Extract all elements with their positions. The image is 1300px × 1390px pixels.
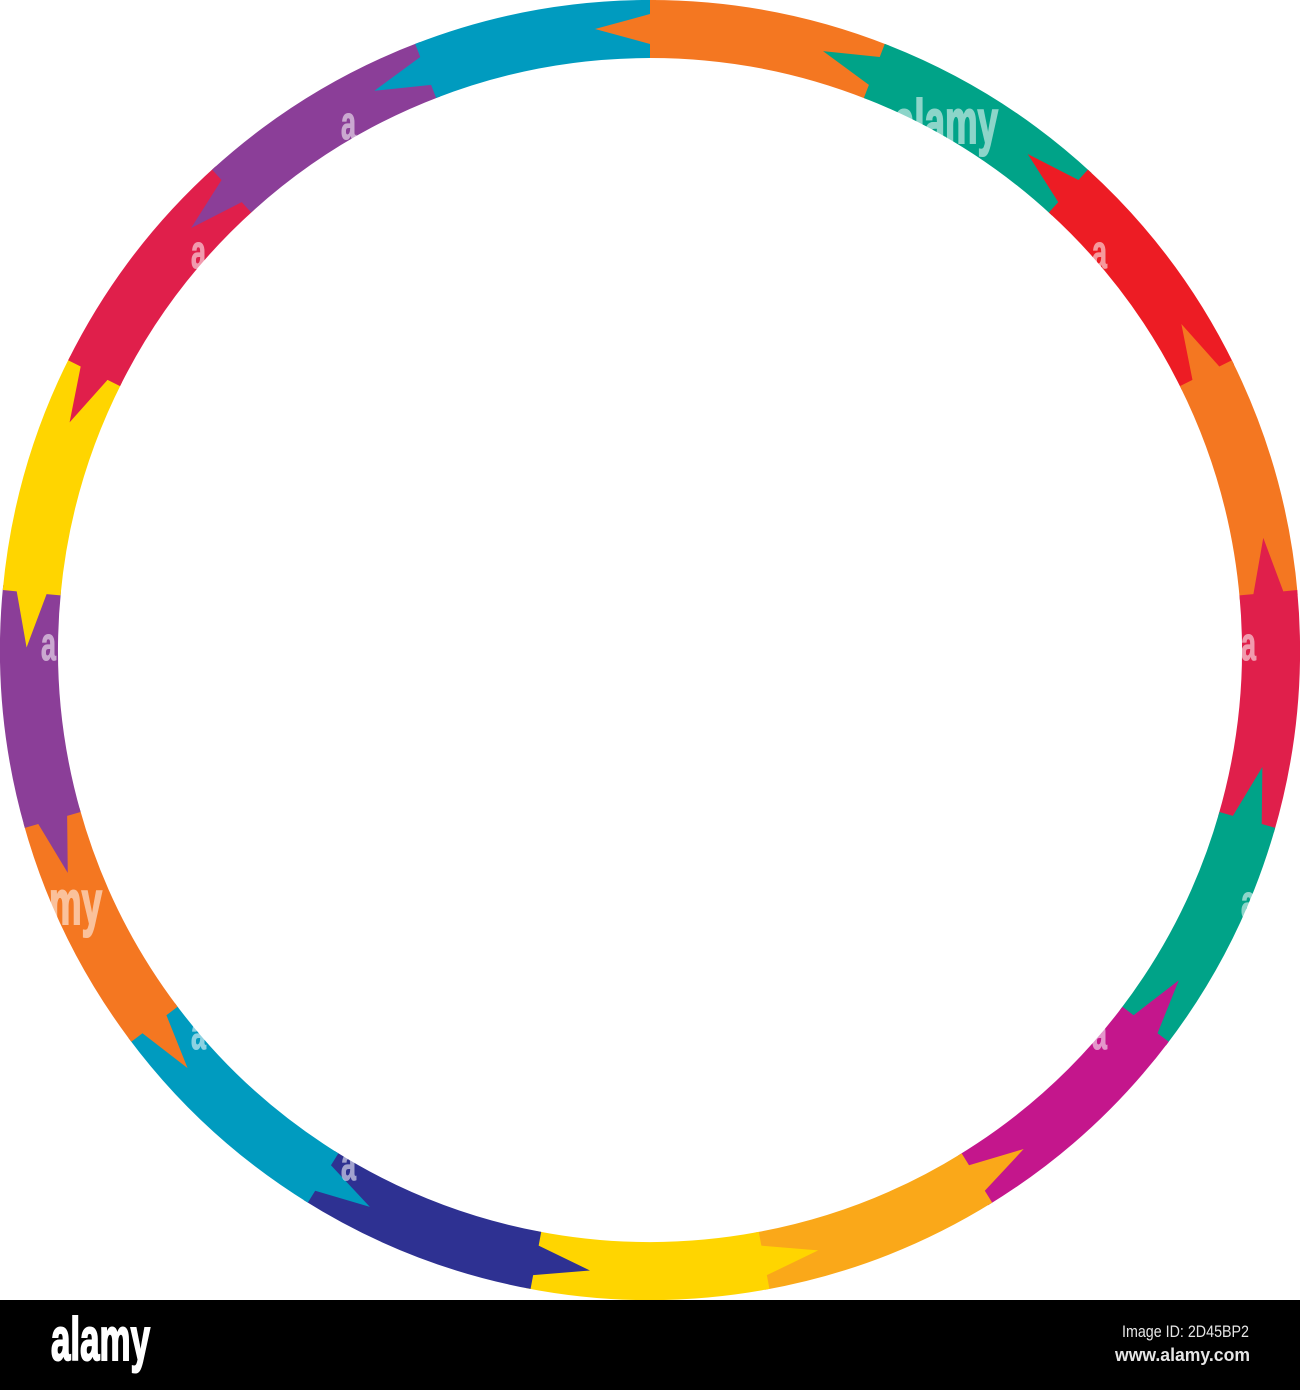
footer bar <box>0 1300 1300 1390</box>
orange arrow tip at top of ring <box>595 0 656 58</box>
segment 3: red <box>980 133 1265 404</box>
segment 16: purple <box>171 8 456 280</box>
watermark: alamy on green: alamy <box>894 88 998 157</box>
segment 5: crimson <box>1193 535 1300 837</box>
segment 12: orange <box>0 791 244 1086</box>
segment 2: green <box>798 24 1108 223</box>
footer logo: alamy: alamy <box>51 1306 150 1373</box>
watermark: a on upper-left crimson: a <box>191 225 206 278</box>
website address: www.alamy.com <box>1114 1345 1250 1365</box>
segment 14: yellow <box>0 352 124 654</box>
segment 7: magenta <box>945 938 1202 1233</box>
image id: Image ID: 2D45BP2 <box>1122 1323 1249 1341</box>
watermark: a on lower-left blue: a <box>191 1006 206 1059</box>
segment 6: green <box>1114 748 1290 1058</box>
segment 17: blue <box>364 0 674 157</box>
segment 4: orange <box>1118 311 1300 619</box>
segment 1: orange <box>595 0 889 100</box>
watermark: alamy on lower-left orange: alamy <box>0 869 102 938</box>
watermark: a on right green: a <box>1241 875 1256 928</box>
watermark: a on magenta: a <box>1092 1006 1107 1059</box>
segment 13: purple <box>0 570 136 881</box>
watermark: a on left purple: a <box>41 617 56 670</box>
segment 10: navy <box>295 1147 603 1299</box>
watermark: a on red: a <box>1092 225 1107 278</box>
segment 8: amber <box>736 1089 1039 1329</box>
footer background <box>0 1300 1300 1390</box>
watermark: a on right crimson: a <box>1241 617 1256 670</box>
watermark marks on ring <box>0 88 1256 1190</box>
watermark: a on purple: a <box>341 96 356 149</box>
segment 11: blue <box>104 992 407 1232</box>
segment 9: yellow <box>516 1181 823 1333</box>
segment 15: crimson <box>44 146 264 454</box>
watermark: a on navy: a <box>341 1137 356 1190</box>
